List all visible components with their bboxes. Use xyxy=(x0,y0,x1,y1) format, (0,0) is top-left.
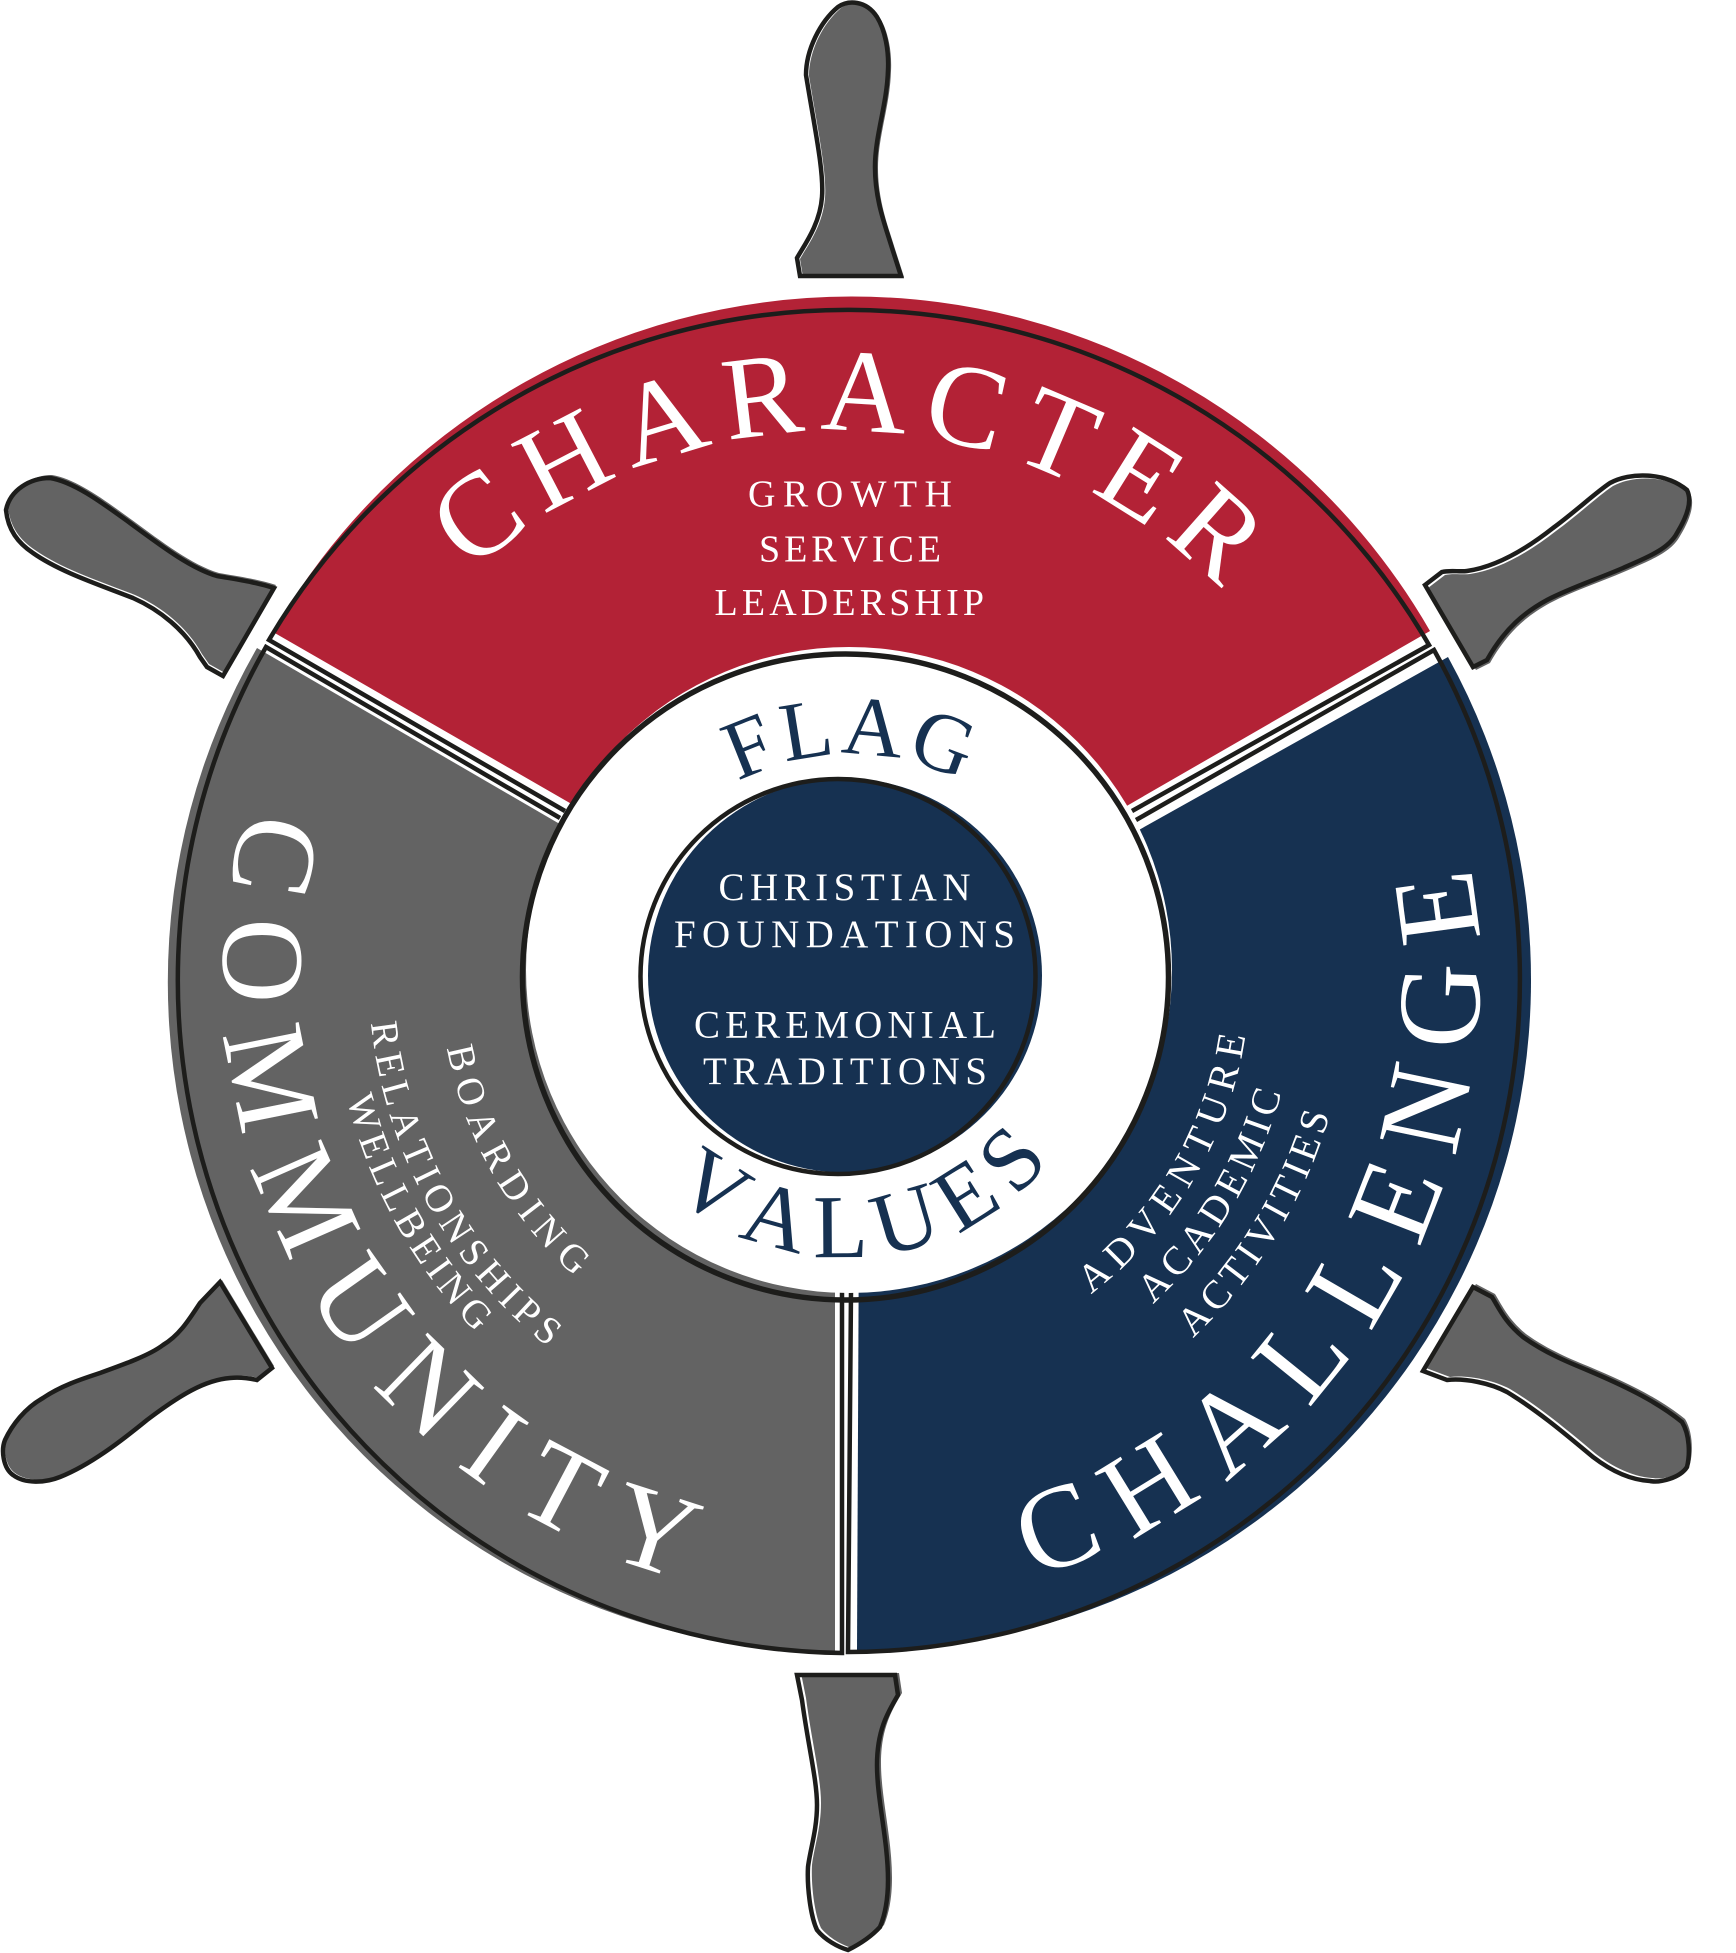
heading: flag: FLAG xyxy=(719,699,972,780)
panel: character segment xyxy=(269,297,1430,965)
text: challenge values: ACTIVITIES xyxy=(1183,1110,1328,1338)
text: challenge values: ACADEMIC xyxy=(1143,1088,1280,1304)
handle: top xyxy=(797,3,904,277)
text: centre labels: FOUNDATIONS xyxy=(674,913,1015,956)
text: challenge values xyxy=(1084,1034,1328,1338)
heading: community: COMMUNITY xyxy=(222,821,704,1574)
text: community values: RELATIONSHIPS xyxy=(371,1020,561,1343)
text: community values: BOARDING xyxy=(446,1043,589,1274)
handle: upper left xyxy=(6,475,276,676)
text: character values: GROWTH xyxy=(748,474,952,516)
panel: navy centre circle xyxy=(640,778,1042,1174)
text: centre labels: CEREMONIAL xyxy=(694,1004,996,1046)
panel: challenge segment xyxy=(848,650,1531,1652)
handle: bottom xyxy=(797,1673,902,1950)
text: centre labels: CHRISTIAN xyxy=(718,866,970,909)
handle: upper right xyxy=(1425,475,1692,670)
text: character values: SERVICE xyxy=(759,528,941,570)
text: centre labels: TRADITIONS xyxy=(703,1050,987,1093)
panel: white centre ring xyxy=(522,647,1172,1300)
heading: challenge: CHALLENGE xyxy=(1020,874,1480,1568)
panel: community segment xyxy=(168,647,842,1653)
text: character values: LEADERSHIP xyxy=(714,582,984,624)
handle: lower left xyxy=(3,1280,274,1482)
text: centre labels xyxy=(674,866,1015,1093)
text: challenge values: ADVENTURE xyxy=(1084,1034,1246,1294)
heading: character: CHARACTER xyxy=(440,352,1255,588)
text: character values xyxy=(714,474,984,624)
handle: lower right xyxy=(1423,1284,1692,1481)
text: community values: WELLBEING xyxy=(349,1091,492,1329)
heading: values: VALUES xyxy=(696,1128,1040,1258)
